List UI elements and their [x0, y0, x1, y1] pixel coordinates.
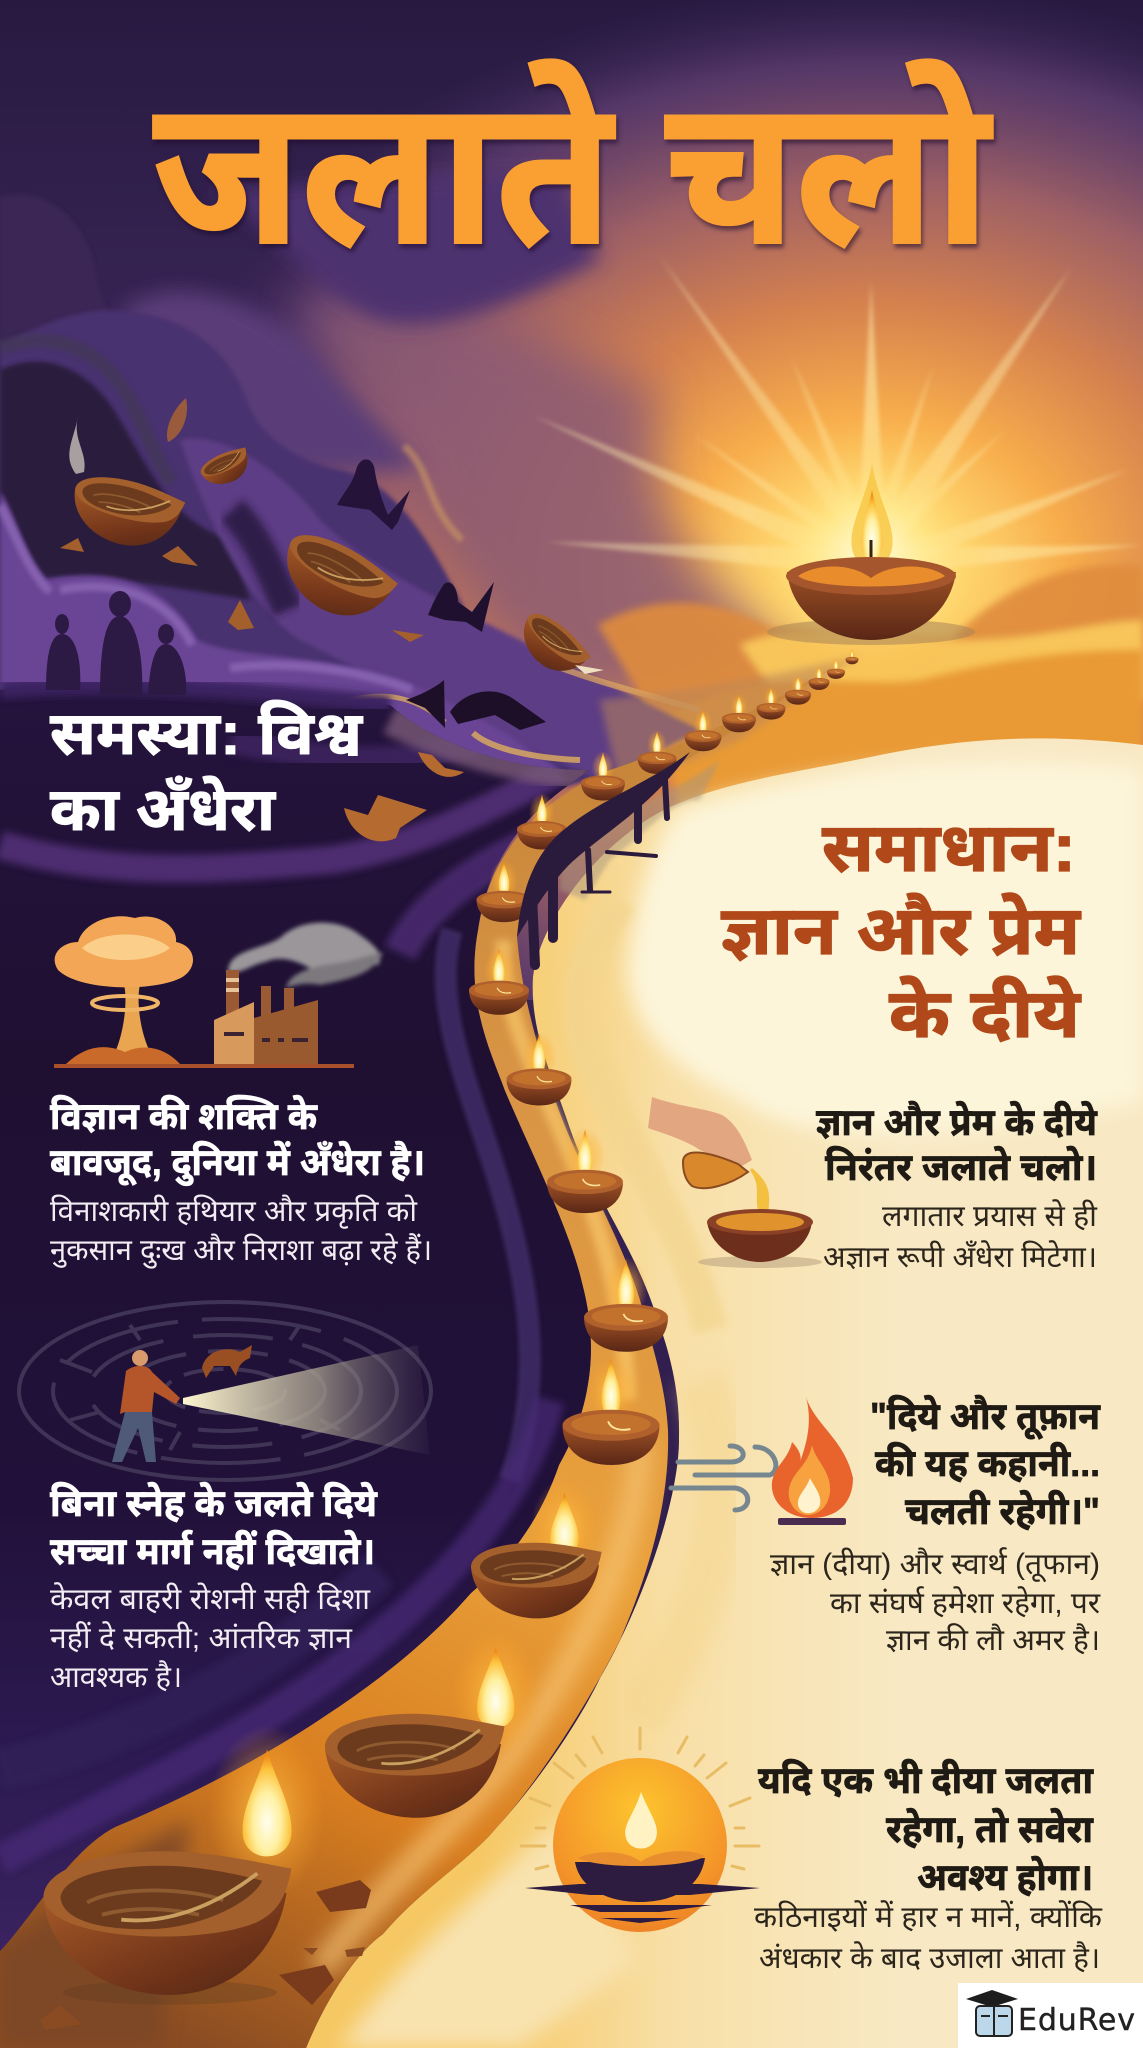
icon: mushroom cloud and factory: [54, 916, 383, 1068]
icon: broken lamp: [344, 795, 427, 841]
person: [112, 1350, 180, 1462]
icon: wind and fire: [671, 1397, 853, 1525]
icon: main diya with bright flame: [767, 464, 975, 645]
factory smoke: [228, 923, 383, 988]
animal: [202, 1345, 252, 1378]
text block: lamp and storm: "दिये और तूफ़ान: [870, 1394, 1101, 1440]
diya 2: [325, 1628, 540, 1818]
cream ground: [306, 738, 1143, 2048]
icon: dead lamp with smoke: [65, 416, 187, 557]
purple arch layers: [0, 194, 118, 720]
icon: leaf: [167, 398, 187, 442]
sand dunes: [598, 564, 1143, 810]
icon: broken shard: [418, 752, 464, 777]
icon: small bowl: [197, 444, 256, 492]
icon: silhouetted people: [46, 591, 186, 695]
sky cloud wash: [300, 292, 800, 700]
logo: EduRev: [958, 1983, 1143, 2048]
factory: [226, 970, 294, 1025]
text block: lamps without oil: नहीं दे सकती; आंतरिक ज्ञान: [50, 1620, 353, 1655]
text block: science: [50, 1094, 432, 1269]
text block: lamp and storm: का संघर्ष हमेशा रहेगा, पर: [830, 1585, 1101, 1620]
heading: problem: [50, 700, 364, 843]
icon: third lamp: [511, 606, 604, 686]
flashlight beam: [183, 1345, 430, 1455]
text block: dawn: अवश्य होगा।: [917, 1855, 1093, 1899]
icon: sunrise with dark diya: [521, 1728, 760, 1932]
text block: keep lighting: ज्ञान और प्रेम के दीये: [816, 1100, 1098, 1144]
icon: hand pouring oil into bowl: [648, 1097, 822, 1268]
dark purple mass: [0, 686, 591, 1951]
text block: keep lighting: [816, 1100, 1098, 1274]
heading: problem: का अँधेरा: [50, 776, 276, 843]
icon: crow-like shadow: [406, 680, 546, 730]
text block: lamps without oil: [50, 1481, 378, 1694]
text block: lamps without oil: केवल बाहरी रोशनी सही दिशा: [50, 1581, 371, 1616]
text block: dawn: [754, 1758, 1103, 1975]
icon: large foreground diyas: [40, 1478, 602, 2030]
text block: dawn: कठिनाइयों में हार न मानें, क्योंकि: [754, 1900, 1103, 1934]
diya chain along the path: [469, 650, 858, 1465]
icon: shadow figure: [337, 459, 410, 530]
shards: [279, 1880, 371, 2005]
heading: solution: [721, 810, 1082, 1052]
heading: solution: ज्ञान और प्रेम: [721, 893, 1082, 969]
text block: lamp and storm: चलती रहेगी।": [905, 1489, 1100, 1533]
orange path band: [0, 650, 860, 2048]
text block: science: नुकसान दुःख और निराशा बढ़ा रहे हैं।: [50, 1232, 432, 1269]
icon: tipped lamp: [270, 523, 402, 635]
sand above the path: [600, 655, 860, 790]
diya 3: [471, 1478, 602, 1618]
icon: maze with person and flashlight: [19, 1302, 431, 1480]
heading: problem: समस्या: विश्व: [50, 700, 364, 767]
text block: lamps without oil: बिना स्नेह के जलते दिये: [50, 1481, 378, 1525]
sun rays behind main lamp: [532, 257, 1143, 685]
text block: science: विनाशकारी हथियार और प्रकृति को: [50, 1194, 418, 1230]
diya 1: [43, 1725, 325, 2005]
text block: keep lighting: निरंतर जलाते चलो।: [825, 1145, 1097, 1189]
text block: science: बावजूद, दुनिया में अँधेरा है।: [50, 1140, 425, 1186]
text block: dawn: रहेगा, तो सवेरा: [886, 1807, 1094, 1851]
text block: science: विज्ञान की शक्ति के: [50, 1094, 318, 1138]
title: जलाते चलो: [153, 58, 993, 287]
panel: problem side decorations: [46, 398, 604, 841]
text block: keep lighting: लगातार प्रयास से ही: [882, 1198, 1098, 1233]
icon: shards: [60, 538, 424, 642]
text block: dawn: अंधकार के बाद उजाला आता है।: [759, 1940, 1100, 1975]
text block: lamps without oil: सच्चा मार्ग नहीं दिखाते।: [50, 1529, 375, 1573]
logo: EduRev: EduRev: [1018, 2003, 1135, 2038]
text block: lamp and storm: की यह कहानी...: [875, 1441, 1100, 1485]
heading: solution: के दीये: [889, 976, 1082, 1052]
near-white glow in the ground: [628, 762, 1143, 1134]
text block: keep lighting: अज्ञान रूपी अँधेरा मिटेगा।: [823, 1239, 1097, 1274]
text block: lamp and storm: ज्ञान (दीया) और स्वार्थ (तूफान): [770, 1547, 1100, 1583]
text block: lamp and storm: [770, 1394, 1101, 1657]
icon: second shadow figure: [428, 582, 494, 632]
text block: dawn: यदि एक भी दीया जलता: [758, 1758, 1094, 1802]
heading: solution: समाधान:: [822, 810, 1076, 886]
text block: lamps without oil: आवश्यक है।: [50, 1659, 182, 1694]
dark drips over the path: [517, 752, 720, 965]
text block: lamp and storm: ज्ञान की लौ अमर है।: [886, 1622, 1100, 1657]
